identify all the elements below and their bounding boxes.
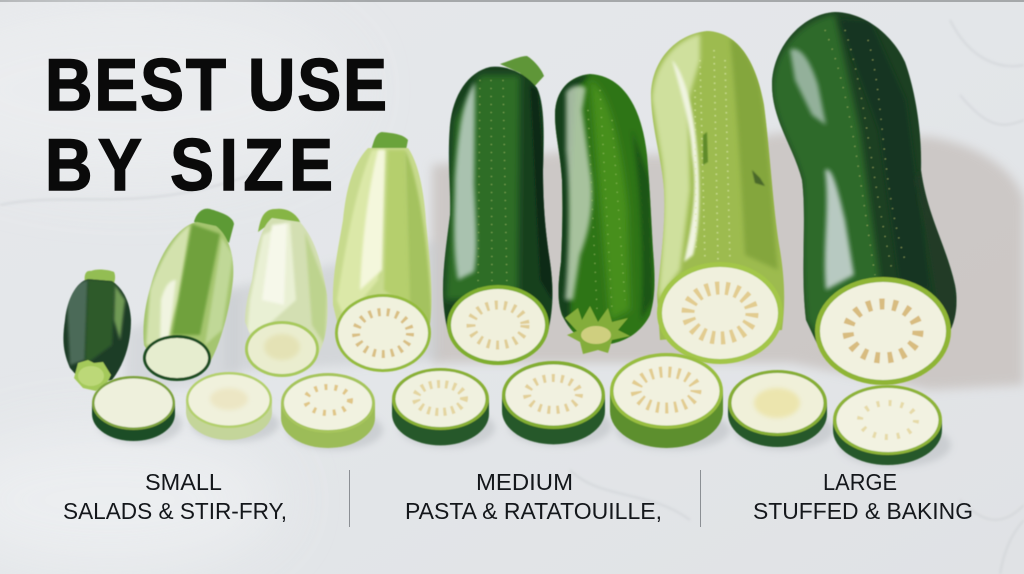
cut face: [245, 321, 319, 377]
cut face: [335, 294, 431, 372]
stem: [258, 209, 301, 232]
caption: small: [63, 469, 287, 524]
zucchini 7: large light: [645, 25, 790, 364]
stem: [500, 56, 544, 88]
slice 1: [92, 376, 175, 441]
caption: medium: MEDIUM: [476, 469, 573, 495]
cut face: [815, 277, 951, 385]
slice 3: [281, 373, 375, 448]
caption: large: LARGE: [823, 469, 897, 495]
zucchini 5: dark medium: [442, 55, 554, 366]
slice 2: [186, 372, 272, 440]
slice 7: [728, 370, 827, 447]
caption: large: STUFFED & BAKING: [753, 498, 973, 524]
zucchini 6: glossy green with blossom end: [554, 73, 656, 355]
zucchini 4: pale green: [332, 131, 432, 373]
zucchini 1: small dark: [62, 268, 132, 392]
cut face: [447, 285, 549, 365]
zucchini 8: largest dark: [765, 5, 965, 385]
cut face: [657, 262, 783, 364]
stem: [194, 209, 234, 243]
slice 4: [392, 368, 489, 445]
blossom end: [565, 306, 630, 354]
zucchini 3: pale: [244, 208, 328, 378]
caption: small: SALADS & STIR-FRY,: [63, 498, 287, 524]
stem: [85, 269, 115, 285]
cast shadows: [98, 133, 1024, 467]
caption: medium: [405, 469, 662, 524]
slice 5: [502, 361, 605, 444]
slice 8: [833, 385, 942, 465]
caption: large: [753, 469, 973, 524]
slice 6: [610, 353, 723, 448]
title: [45, 44, 387, 206]
zucchini 2: small striped: [142, 208, 235, 382]
cut face: [143, 335, 211, 381]
caption: medium: PASTA & RATATOUILLE,: [405, 498, 662, 524]
caption: small: SMALL: [145, 469, 222, 495]
title: BY SIZE: [45, 124, 333, 206]
blossom end: [74, 360, 111, 391]
stem: [371, 132, 408, 150]
title: BEST USE: [45, 44, 387, 126]
